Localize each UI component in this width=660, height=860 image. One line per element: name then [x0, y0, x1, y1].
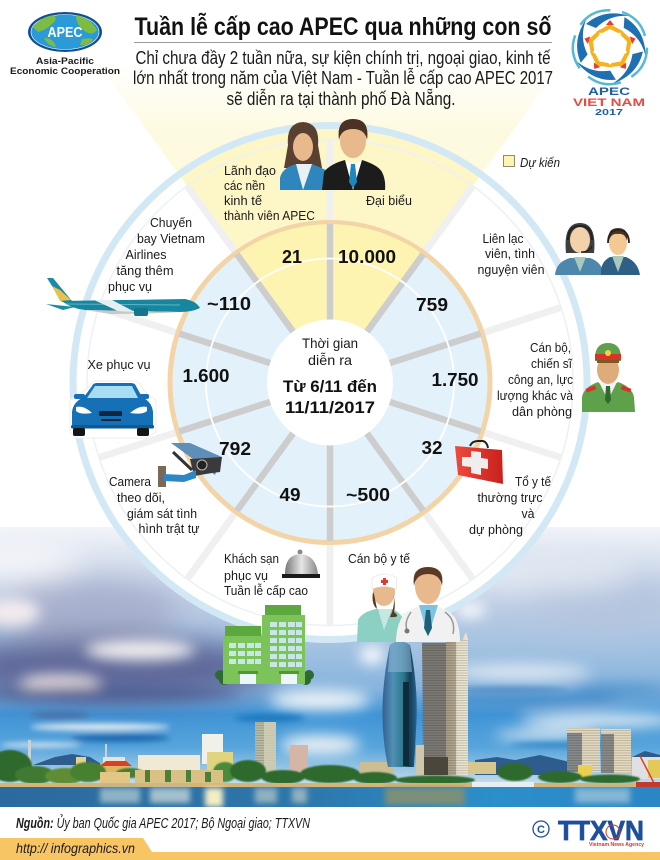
intro text: Chỉ chưa đầy 2 tuần nữa, sự kiện chính trị, ngoại giao, kinh tế [136, 48, 550, 68]
label: camera: theo dõi, [117, 490, 165, 505]
APEC logo left: Economic Cooperation [10, 66, 120, 77]
label: police: Cán bộ, [530, 340, 571, 355]
label: camera [109, 474, 200, 536]
label: flights: phục vụ [108, 279, 152, 294]
numbers in sectors: 49 [280, 485, 300, 505]
TTXVN logo: TTXVN [558, 815, 644, 846]
APEC Viet Nam 2017 logo: VIET NAM [573, 97, 645, 109]
label: hotels [224, 551, 308, 598]
label: call staff: viên, tình [485, 246, 535, 261]
label: leaders: thành viên APEC [224, 208, 315, 223]
outer white disc with blue ring [72, 124, 588, 641]
footer [0, 807, 660, 860]
numbers in sectors: 32 [422, 438, 442, 458]
center: event dates: Thời gian [302, 335, 358, 351]
numbers in sectors: 792 [219, 439, 251, 459]
numbers in sectors [182, 247, 478, 505]
label: camera: Camera [109, 474, 152, 489]
icon: leader and delegate [280, 119, 385, 190]
center: event dates: Từ 6/11 đến [283, 377, 377, 396]
TTXVN logo: C [537, 824, 545, 836]
label: medical teams: và [522, 506, 535, 521]
label: flights: bay Vietnam [137, 231, 205, 246]
icon: hotel buildings [215, 605, 314, 685]
label: medical teams: dự phòng [469, 522, 523, 537]
icon: police officer [582, 343, 635, 412]
label: leaders: kinh tế [224, 193, 263, 208]
center: event dates: diễn ra [308, 352, 352, 368]
label: leaders: các nền [224, 178, 265, 193]
sky and city photo [0, 527, 660, 807]
icon: headset operators [555, 223, 640, 275]
numbers in sectors: 21 [282, 247, 302, 267]
label: medical teams [469, 474, 552, 537]
icon: car [70, 381, 156, 438]
label: flights: tăng thêm [116, 263, 174, 278]
label: camera: giám sát tình [127, 506, 197, 521]
intro text [133, 48, 553, 109]
label: leaders [224, 163, 315, 223]
icon: nurse and doctor [357, 567, 460, 642]
title: Tuần lễ cấp cao APEC qua những con số [134, 11, 552, 41]
legend: Dự kiến: Dự kiến [520, 156, 560, 170]
numbers in sectors: 1.600 [182, 366, 230, 386]
label: cars: Xe phục vụ [88, 357, 150, 372]
label: police: công an, lực [508, 372, 573, 387]
icon: first-aid kit [455, 441, 503, 484]
label: police [497, 340, 574, 419]
APEC Viet Nam 2017 logo [561, 3, 654, 117]
intro text: lớn nhất trong năm của Việt Nam - Tuần lễ cấp cao APEC 2017 [133, 67, 553, 88]
shoreline trees [0, 750, 640, 784]
website: http:// infographics.vn [16, 840, 135, 856]
label: delegates: Đại biểu [366, 193, 412, 208]
label: call staff: Liên lạc [482, 231, 524, 246]
distant mountains [33, 751, 660, 775]
APEC Viet Nam 2017 logo: 2017 [595, 108, 624, 117]
wheel diagram [72, 124, 588, 641]
label: call staff [478, 231, 544, 277]
label: police: dân phòng [512, 404, 572, 419]
APEC logo left: APEC [48, 25, 83, 41]
icon: airplane [46, 278, 200, 316]
label: flights: Chuyến [150, 215, 192, 230]
center: event dates [283, 335, 377, 417]
skyline buildings [28, 722, 308, 773]
numbers in sectors: 1.750 [432, 370, 478, 390]
APEC Viet Nam 2017 logo: APEC [588, 86, 630, 98]
label: leaders: Lãnh đạo [224, 163, 276, 178]
numbers in sectors: ~110 [207, 294, 251, 314]
label: hotels: Khách sạn [224, 551, 279, 566]
label: medical staff: Cán bộ y tế [348, 551, 411, 566]
label: police: lượng khác và [497, 388, 574, 403]
icon: security camera [158, 443, 222, 487]
numbers in sectors: 10.000 [338, 247, 396, 267]
label: medical teams: thường trực [478, 490, 543, 505]
icon: service bell [282, 550, 320, 578]
label: hotels: Tuần lễ cấp cao [224, 583, 308, 598]
water [0, 787, 660, 807]
label: police: chiến sĩ [531, 356, 573, 371]
TTXVN logo: Vietnam News Agency [589, 842, 645, 848]
inner disc with sectors [170, 222, 490, 542]
APEC logo left [10, 12, 120, 77]
APEC logo left: Asia-Pacific [36, 56, 94, 67]
numbers in sectors: 759 [416, 295, 448, 315]
numbers in sectors: ~500 [346, 485, 390, 505]
label: hotels: phục vụ [224, 568, 268, 583]
source: Nguồn: Ủy ban Quốc gia APEC 2017; Bộ Ngoại giao; TTXVN [16, 814, 310, 832]
label: medical teams: Tổ y tế [515, 474, 552, 489]
label: flights [108, 215, 205, 294]
outer spokes [99, 140, 561, 625]
center: event dates: 11/11/2017 [285, 398, 375, 417]
label: call staff: nguyện viên [478, 262, 544, 277]
intro text: sẽ diễn ra tại thành phố Đà Nẵng. [226, 88, 456, 109]
orange footer strip [0, 838, 660, 860]
label: flights: Airlines [126, 247, 167, 262]
highlight beam [95, 59, 565, 382]
label: camera: hình trật tự [138, 521, 200, 536]
legend: Dự kiến [504, 156, 560, 170]
